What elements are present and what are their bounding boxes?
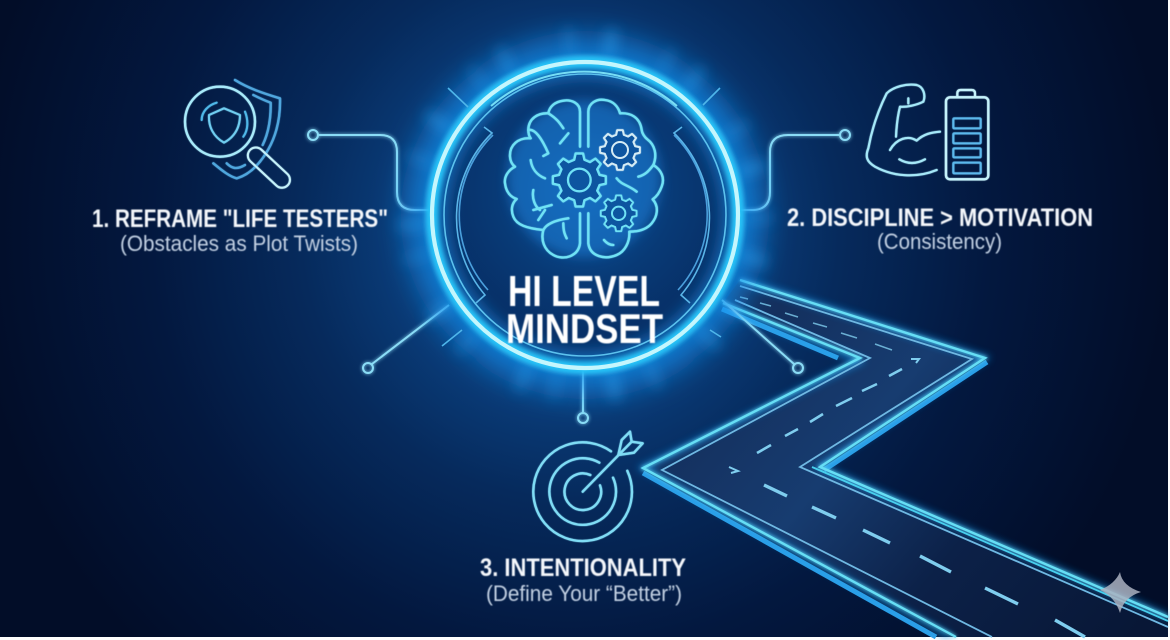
road <box>643 280 1168 637</box>
connector lines <box>308 130 850 423</box>
title: MINDSET <box>506 305 663 352</box>
icon: magnifier and shield <box>185 80 293 191</box>
back shield <box>213 80 280 178</box>
connector: discipline <box>736 130 850 210</box>
outer ticks <box>442 88 721 346</box>
road outer bright lines <box>643 280 1168 637</box>
heading: discipline <box>787 204 1093 254</box>
brain glow backdrop <box>507 100 661 257</box>
heading: reframe <box>92 205 388 256</box>
connector: intentionality <box>578 368 588 423</box>
thin inner arcs <box>444 72 726 356</box>
subheading: intentionality: (Define Your “Better”) <box>486 581 682 606</box>
lens <box>185 87 255 157</box>
battery <box>946 90 988 179</box>
title: HI LEVEL <box>508 267 660 316</box>
icon: brain with gears <box>505 100 663 257</box>
inner disc <box>435 65 735 365</box>
subheading: reframe: (Obstacles as Plot Twists) <box>120 231 358 256</box>
connector: lower right <box>722 300 803 373</box>
heading: discipline: 2. DISCIPLINE > MOTIVATION <box>787 204 1093 232</box>
road side glow <box>643 280 1168 637</box>
heading: intentionality: 3. INTENTIONALITY <box>480 554 686 582</box>
title <box>506 267 663 352</box>
road surface <box>643 280 1168 637</box>
heading: intentionality <box>480 554 686 606</box>
muscle arm <box>867 85 940 175</box>
ring halo <box>423 53 747 377</box>
inner edge glow <box>438 68 732 362</box>
gear: lower right <box>601 196 636 231</box>
icon: sparkle watermark <box>1100 572 1141 613</box>
road thick lower edges <box>643 309 987 637</box>
connector: reframe <box>308 130 436 210</box>
heading: reframe: 1. REFRAME "LIFE TESTERS" <box>92 205 388 233</box>
main ring <box>432 62 738 368</box>
icon: muscle and battery <box>867 85 988 179</box>
central glowing ring <box>413 43 757 387</box>
subheading: discipline: (Consistency) <box>877 229 1002 254</box>
handle <box>245 144 293 191</box>
inner shield <box>209 108 240 143</box>
gear: top right <box>600 130 640 170</box>
gear: centre <box>553 154 606 206</box>
brain outlines <box>505 100 663 257</box>
connector: lower left <box>363 305 449 373</box>
road centre dashes <box>729 297 1085 637</box>
ring rays <box>413 43 757 387</box>
icon: target and arrow <box>533 432 643 541</box>
road inner lines <box>662 286 1168 637</box>
